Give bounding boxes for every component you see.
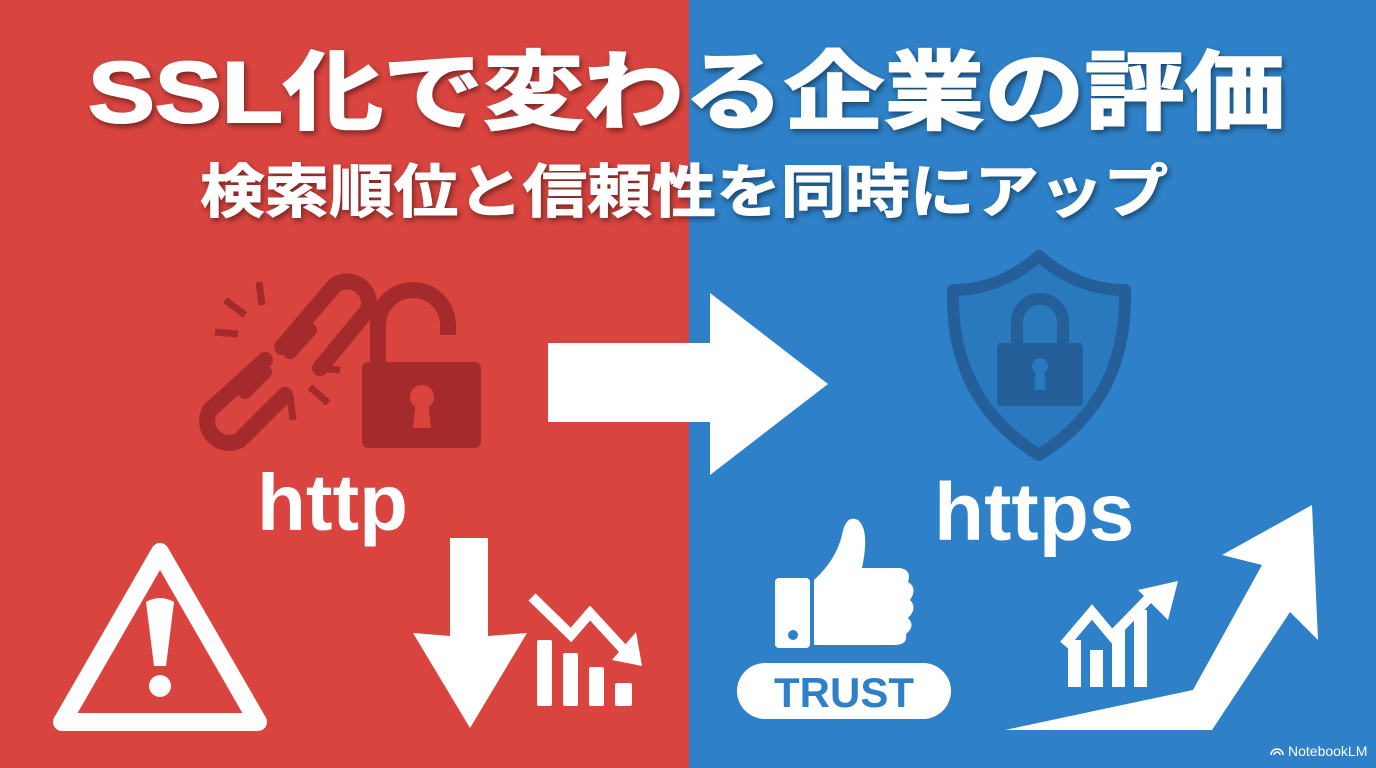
icon: thumbs up bbox=[775, 519, 914, 648]
panel: http side (red) bbox=[0, 0, 689, 768]
label: http: http bbox=[257, 458, 408, 547]
arrow: right transition bbox=[548, 293, 828, 475]
panel: https side (blue) bbox=[689, 0, 1376, 768]
icon: broken chain bbox=[207, 281, 369, 443]
icon: warning triangle bbox=[62, 552, 258, 722]
badge: TRUST bbox=[737, 663, 951, 719]
subtitle: 検索順位と信頼性を同時にアップ bbox=[200, 160, 1168, 225]
arrow: down bbox=[413, 538, 527, 728]
chart: rising bbox=[1064, 581, 1178, 687]
title: SSL化で変わる企業の評価 bbox=[88, 45, 1285, 141]
label: https: https bbox=[934, 467, 1134, 558]
arrow: big rising bbox=[1005, 505, 1318, 730]
badge: TRUST: TRUST bbox=[774, 669, 914, 716]
logo: NotebookLM: NotebookLM bbox=[1288, 743, 1367, 759]
chart: declining bbox=[532, 597, 642, 706]
icon: shield with lock bbox=[953, 256, 1125, 455]
icon: open padlock bbox=[362, 290, 481, 448]
